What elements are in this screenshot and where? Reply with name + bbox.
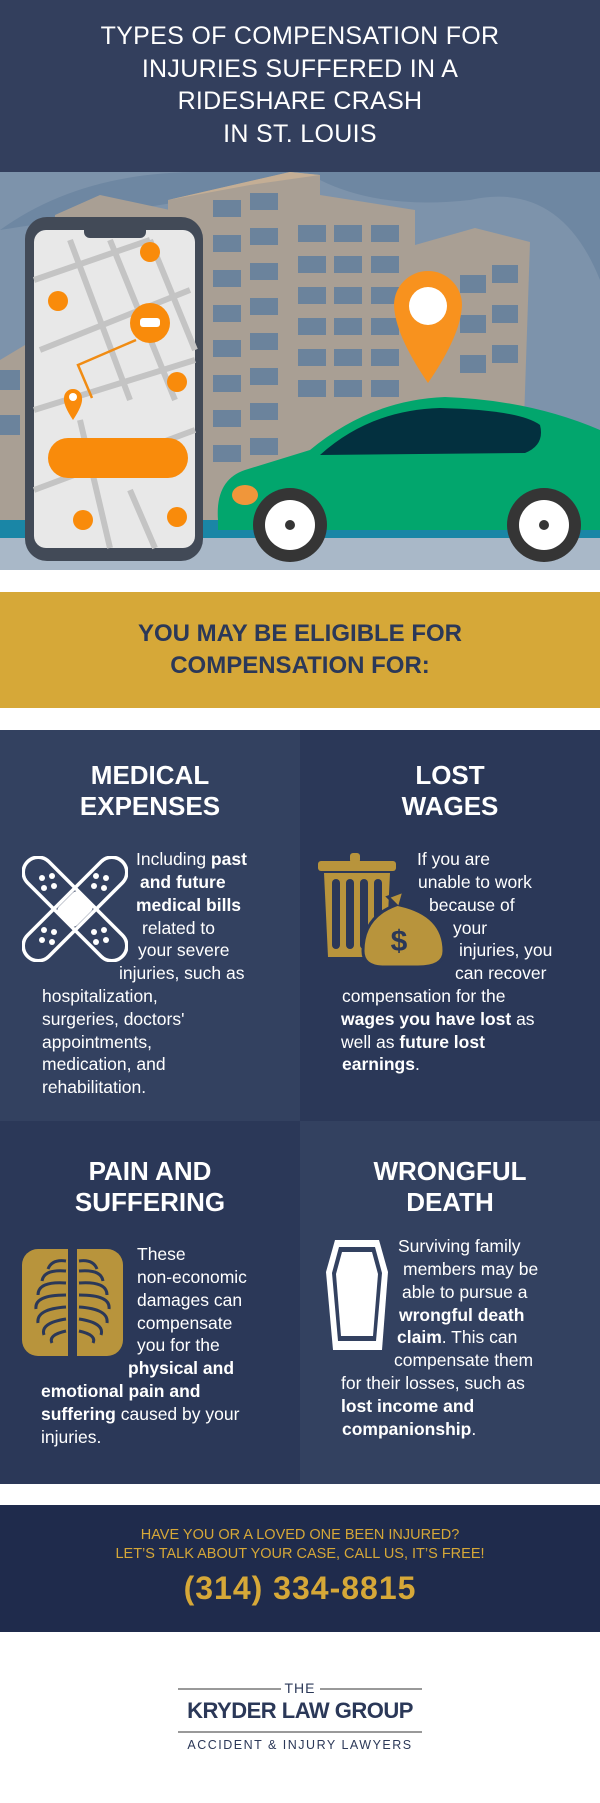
- text: medical body: rehabilitation.: [42, 1077, 146, 1097]
- heading: lost wages: LOST: [415, 760, 485, 790]
- heading: lost wages: WAGES: [402, 791, 498, 821]
- text: wrongful body: [341, 1236, 538, 1439]
- header: title: IN ST. LOUIS: [223, 120, 377, 148]
- text: wrongful body: compensate them: [394, 1350, 533, 1370]
- icon: rib cage: [22, 1249, 123, 1356]
- call to action: [0, 1505, 600, 1632]
- logo: THE: [284, 1680, 316, 1696]
- icon: trash can and money bag: $: [391, 925, 408, 958]
- eligibility banner: YOU MAY BE ELIGIBLE FOR: [138, 620, 462, 647]
- text: wrongful body: able to pursue a: [402, 1282, 528, 1302]
- icon: bandages: [22, 856, 128, 962]
- text: medical body: [42, 849, 247, 1097]
- heading: pain and suffering: [75, 1156, 225, 1217]
- icon: coffin: [326, 1240, 388, 1350]
- heading: lost wages: [402, 760, 498, 821]
- text: wrongful body: companionship.: [342, 1419, 476, 1439]
- header: title: INJURIES SUFFERED IN A: [142, 54, 458, 82]
- text: pain body: damages can: [137, 1290, 242, 1310]
- text: lost wages body: injuries, you: [459, 940, 552, 960]
- heading: medical expenses: [80, 760, 220, 821]
- text: pain body: [41, 1244, 247, 1447]
- heading: wrongful death: DEATH: [406, 1187, 494, 1217]
- text: medical body: your severe: [138, 940, 229, 960]
- heading: medical expenses: EXPENSES: [80, 791, 220, 821]
- text: lost wages body: earnings.: [342, 1054, 420, 1074]
- logo: ACCIDENT & INJURY LAWYERS: [187, 1738, 413, 1752]
- text: cta question: HAVE YOU OR A LOVED ONE BEEN INJURED?: [141, 1527, 459, 1543]
- eligibility banner: COMPENSATION FOR:: [170, 652, 430, 679]
- text: cta question: [115, 1527, 485, 1562]
- text: lost wages body: can recover: [455, 963, 546, 983]
- header: title: TYPES OF COMPENSATION FOR: [101, 22, 499, 50]
- text: medical body: hospitalization,: [42, 986, 158, 1006]
- text: medical body: surgeries, doctors': [42, 1009, 184, 1029]
- illustration: city, phone and car: [0, 172, 600, 570]
- heading: wrongful death: [373, 1156, 527, 1217]
- panel: lost wages: [300, 730, 600, 1121]
- logo: [178, 1680, 422, 1752]
- text: medical body: and future: [140, 872, 226, 892]
- phone: [25, 217, 203, 561]
- text: pain body: These: [137, 1244, 186, 1264]
- heading: wrongful death: WRONGFUL: [373, 1156, 527, 1186]
- text: medical body: injuries, such as: [119, 963, 244, 983]
- text: cta question: LET’S TALK ABOUT YOUR CASE, CALL US, IT’S FREE!: [115, 1546, 485, 1562]
- text: wrongful body: members may be: [403, 1259, 538, 1279]
- text: medical body: related to: [142, 918, 215, 938]
- text: pain body: non-economic: [137, 1267, 247, 1287]
- logo: KRYDER LAW GROUP: [187, 1698, 413, 1723]
- text: wrongful body: claim. This can: [397, 1327, 517, 1347]
- text: wrongful body: wrongful death: [399, 1305, 524, 1325]
- text: medical body: medication, and: [42, 1054, 166, 1074]
- text: lost wages body: wages you have lost as: [341, 1009, 535, 1029]
- text: lost wages body: well as future lost: [341, 1032, 485, 1052]
- text: lost wages body: If you are: [417, 849, 490, 869]
- text: medical body: appointments,: [42, 1032, 152, 1052]
- text: wrongful body: Surviving family: [398, 1236, 521, 1256]
- text: lost wages body: [341, 849, 552, 1074]
- text: lost wages body: your: [453, 918, 487, 938]
- text: medical body: Including past: [136, 849, 247, 869]
- text: lost wages body: compensation for the: [342, 986, 505, 1006]
- panel: pain and suffering: [0, 1121, 300, 1484]
- heading: pain and suffering: PAIN AND: [89, 1156, 211, 1186]
- pin: [394, 271, 462, 383]
- text: medical body: medical bills: [136, 895, 241, 915]
- text: wrongful body: for their losses, such as: [341, 1373, 525, 1393]
- text: pain body: emotional pain and: [41, 1381, 200, 1401]
- heading: pain and suffering: SUFFERING: [75, 1187, 225, 1217]
- text: lost wages body: because of: [429, 895, 515, 915]
- icon: trash can and money bag: [318, 853, 442, 966]
- buildings: [0, 345, 60, 540]
- panel: wrongful death: [300, 1121, 600, 1484]
- car: [218, 397, 600, 530]
- text: pain body: compensate: [137, 1313, 232, 1333]
- text: wrongful body: lost income and: [341, 1396, 474, 1416]
- header: title: [0, 0, 600, 172]
- panel: medical expenses: [0, 730, 300, 1121]
- text: pain body: physical and: [128, 1358, 234, 1378]
- eligibility banner: [0, 592, 600, 708]
- header: title: RIDESHARE CRASH: [178, 87, 422, 115]
- text: phone number: (314) 334-8815: [184, 1570, 416, 1606]
- text: pain body: suffering caused by your: [41, 1404, 239, 1424]
- text: pain body: injuries.: [41, 1427, 101, 1447]
- heading: medical expenses: MEDICAL: [91, 760, 209, 790]
- text: lost wages body: unable to work: [418, 872, 532, 892]
- text: pain body: you for the: [137, 1335, 220, 1355]
